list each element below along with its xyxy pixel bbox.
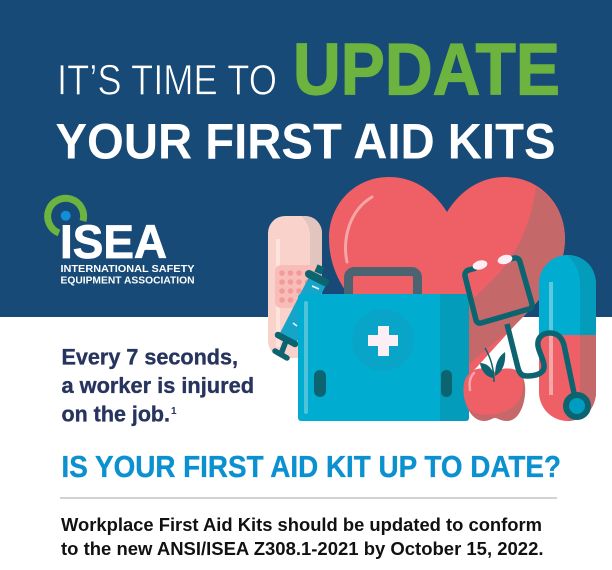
icon: blue dot xyxy=(61,211,71,221)
navy header background xyxy=(0,0,612,317)
compliance note: to the new ANSI/ISEA Z308.1-2021 by October 15, 2022. xyxy=(61,538,544,559)
title line 1: UPDATE xyxy=(293,30,560,110)
icon: first aid kit xyxy=(298,272,469,421)
statistic callout xyxy=(62,344,254,426)
icon: syringe xyxy=(275,268,326,358)
question heading: IS YOUR FIRST AID KIT UP TO DATE? xyxy=(62,450,561,484)
icon: apple xyxy=(463,348,525,421)
icon: pill capsule xyxy=(539,255,596,421)
logo caption: INTERNATIONAL SAFETY xyxy=(60,264,195,275)
logo wordmark: ISEA xyxy=(60,215,167,268)
title line 2: YOUR FIRST AID KITS xyxy=(56,114,556,170)
icon: green arc xyxy=(48,198,84,233)
icon: stethoscope xyxy=(465,253,588,417)
compliance note: Workplace First Aid Kits should be updated to conform xyxy=(61,514,542,535)
statistic callout: 1 xyxy=(171,406,177,417)
title line 1: IT’S TIME TO xyxy=(57,58,277,104)
statistic callout: Every 7 seconds, xyxy=(62,344,238,370)
statistic callout: a worker is injured xyxy=(62,373,254,398)
ISEA logo xyxy=(48,198,195,286)
compliance note xyxy=(61,514,544,559)
icon: heart xyxy=(329,177,565,400)
statistic callout: on the job. xyxy=(62,402,170,426)
divider xyxy=(60,497,557,499)
logo caption: EQUIPMENT ASSOCIATION xyxy=(60,276,194,286)
icon: bandage xyxy=(268,216,322,358)
title line 1 xyxy=(57,30,560,110)
